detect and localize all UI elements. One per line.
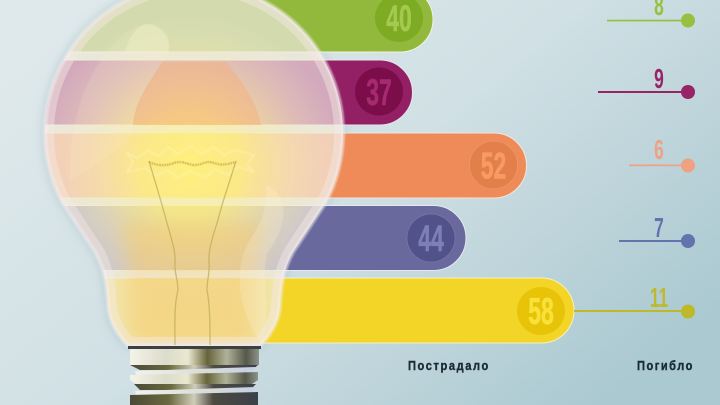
top highlight lobe [125,24,169,52]
bulb screw base [128,346,261,405]
inner rim haze [45,0,343,346]
circle: 40 [375,0,423,42]
base collar [128,346,261,349]
bars: injured [40,0,574,343]
thread 2 [134,384,256,390]
dead: 9: 9 [654,63,664,94]
dead: 7: 7 [654,212,664,243]
filament coil [149,162,236,165]
bar: yellow [104,278,574,344]
bulb shadow [45,0,343,346]
filament support zigzag [127,146,254,178]
bulb glass [40,0,350,346]
circle: 52 [470,141,518,189]
glass reflection top-left [70,25,169,180]
filament wires [149,161,236,345]
label: dead: Погибло [637,358,694,373]
circle: 37 [355,68,403,116]
dead: 6 [629,134,695,172]
right lower reflection [240,185,284,345]
bar: orange [40,133,526,198]
dead: 6: 6 [654,134,664,165]
circle: 58: 58 [528,290,554,332]
dead: 9 [598,63,695,99]
circle: 44 [407,214,455,262]
dead: 11 [574,282,695,318]
inner pear highlight [133,62,261,125]
bar: green [40,0,433,52]
label: injured: Пострадало [408,358,490,373]
glass bands between bars [40,52,350,278]
circle: 37: 37 [366,71,392,113]
dead: 7 [619,212,695,248]
lower body glow [122,222,264,345]
circle: 52: 52 [481,145,506,187]
bar: purple [40,60,412,125]
inner glow [64,42,317,270]
bar: violet [40,206,466,270]
dead: 8 [607,0,695,28]
thread 1 [130,365,258,370]
dead: 11: 11 [650,282,668,313]
circle: 58 [517,287,565,335]
circle: 44: 44 [418,217,444,259]
glass rim [45,0,343,346]
